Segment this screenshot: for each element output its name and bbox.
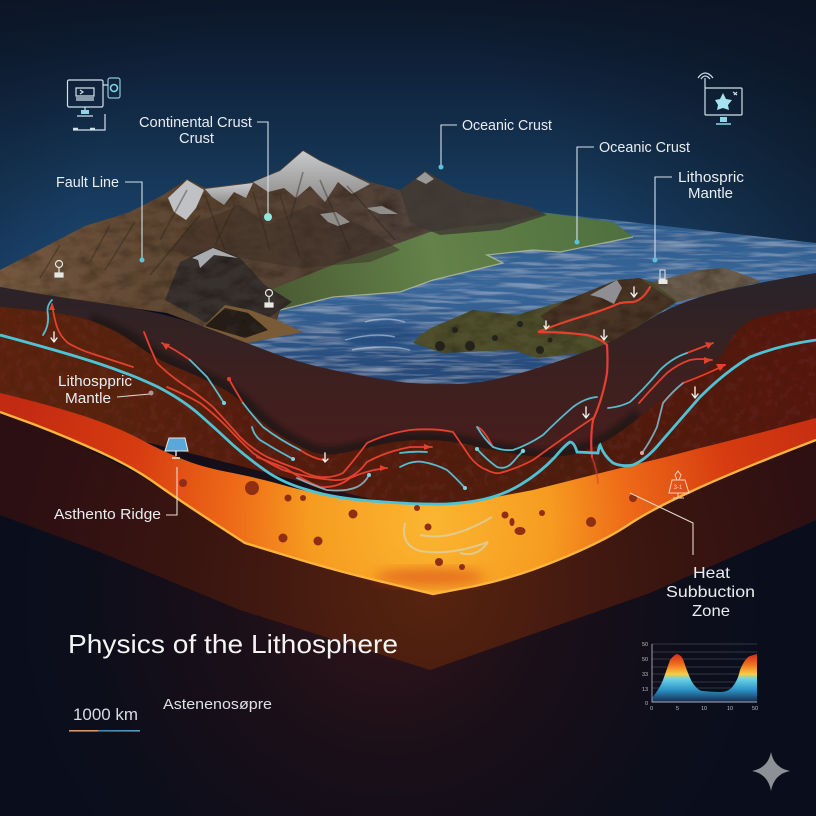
bright lower edge bbox=[0, 412, 816, 594]
label: heat subduction zone: Subbuction bbox=[666, 584, 755, 601]
upper mantle bbox=[0, 307, 816, 515]
label: lithospheric mantle right: Lithospric bbox=[678, 169, 745, 186]
ocean bbox=[240, 212, 816, 388]
cross-section of lithosphere bbox=[0, 265, 816, 515]
mountain body bbox=[0, 150, 633, 343]
chart labels: 10 bbox=[727, 706, 733, 712]
label: oceanic crust one: Oceanic Crust bbox=[462, 117, 553, 134]
snow streaks bbox=[320, 206, 398, 226]
scale bar: 1000 km bbox=[73, 705, 138, 724]
chart labels: 50 bbox=[752, 706, 758, 712]
sky vignette bbox=[0, 0, 816, 300]
chart labels: 0 bbox=[650, 706, 653, 712]
label: fault line bbox=[56, 174, 144, 262]
label: heat subduction zone: Heat bbox=[693, 565, 731, 582]
red glow at keel bbox=[375, 569, 485, 585]
chart labels: 50 bbox=[642, 657, 648, 663]
peak snow oceanic bbox=[416, 172, 434, 184]
label: continental crust: Continental Crust bbox=[139, 114, 253, 131]
label: oceanic crust one bbox=[438, 117, 553, 170]
label: fault line: Fault Line bbox=[56, 174, 119, 191]
green lowlands bbox=[245, 213, 633, 322]
chart axes bbox=[652, 644, 757, 702]
island right hill bbox=[652, 268, 760, 302]
icon: island tower bbox=[659, 270, 667, 284]
chart labels: 13 bbox=[642, 687, 648, 693]
label: oceanic crust two: Oceanic Crust bbox=[599, 139, 691, 156]
label: lithospheric mantle left: Mantle bbox=[65, 390, 111, 407]
label: lithospheric mantle left bbox=[58, 373, 154, 407]
lower mantle wedge bbox=[0, 405, 816, 670]
label: asthenosphere ridge: Asthento Ridge bbox=[54, 506, 161, 523]
icon: heat table bbox=[669, 471, 689, 498]
arrowheads and endpoint dots bbox=[49, 303, 726, 490]
icon: monitor with star and wifi bbox=[698, 73, 742, 124]
blue convection lines bbox=[43, 300, 687, 491]
ridge lines bbox=[40, 172, 395, 278]
icon: sparkle watermark bbox=[752, 752, 790, 791]
red convection lines bbox=[52, 287, 725, 487]
snow on left peak bbox=[168, 180, 204, 220]
chart area bbox=[652, 654, 757, 702]
label: lithospheric mantle right bbox=[652, 169, 745, 262]
dark right ridge bbox=[400, 171, 547, 235]
shore highlight bbox=[280, 237, 633, 310]
icon: left mountain marker bbox=[55, 260, 63, 277]
flow arrows bbox=[43, 287, 726, 491]
label: heat subduction zone bbox=[630, 493, 755, 620]
chart grid bbox=[652, 644, 757, 688]
island brown hill bbox=[540, 278, 675, 342]
chart labels bbox=[642, 642, 758, 712]
island ground bbox=[413, 268, 760, 358]
island bbox=[413, 268, 760, 358]
chart labels: 10 bbox=[701, 706, 707, 712]
front dark hill bbox=[165, 247, 292, 325]
main subduction interface blue line bbox=[0, 335, 816, 504]
dark strip beneath crust bbox=[90, 322, 640, 457]
sand spit with rocks bbox=[200, 305, 303, 343]
continental landmass with mountains bbox=[0, 150, 633, 343]
snow on central ridge bbox=[205, 183, 253, 205]
dark slope facets bbox=[170, 205, 400, 268]
dark crust band bbox=[0, 273, 816, 457]
white down arrows bbox=[51, 287, 698, 462]
background sky bbox=[0, 0, 816, 300]
chart labels: 33 bbox=[642, 672, 648, 678]
icon: monitor with phone bbox=[68, 78, 120, 130]
icon: solar panel bbox=[165, 438, 188, 458]
island rocks bbox=[435, 321, 552, 354]
chart labels: 50 bbox=[642, 642, 648, 648]
label: heat subduction zone: Zone bbox=[692, 603, 730, 620]
snow on main summit bbox=[253, 151, 370, 202]
label: asthenosphere ridge bbox=[54, 467, 177, 523]
label: continental crust: Crust bbox=[179, 130, 215, 147]
icon: heat table: 3-1 bbox=[674, 485, 683, 491]
scale bar bbox=[69, 705, 140, 732]
magma blobs bbox=[179, 479, 637, 570]
background lower dark area bbox=[0, 290, 816, 816]
molten asthenosphere band bbox=[0, 393, 816, 594]
title: Physics of the Lithosphere bbox=[68, 629, 398, 659]
pale convection lines bbox=[404, 517, 492, 554]
heat chart bbox=[642, 642, 758, 712]
label: lithospheric mantle right: Mantle bbox=[688, 185, 733, 202]
front hill snow bbox=[192, 248, 238, 268]
label: oceanic crust two bbox=[574, 139, 691, 244]
icon: coast marker bbox=[265, 290, 273, 307]
label: continental crust bbox=[139, 114, 272, 221]
chart labels: 5 bbox=[676, 706, 679, 712]
label: lithospheric mantle left: Lithosppric bbox=[58, 373, 133, 390]
island snow bbox=[590, 280, 622, 304]
chart labels: 0 bbox=[645, 701, 648, 707]
label: asthenosphere: Astenenosøpre bbox=[163, 696, 272, 713]
